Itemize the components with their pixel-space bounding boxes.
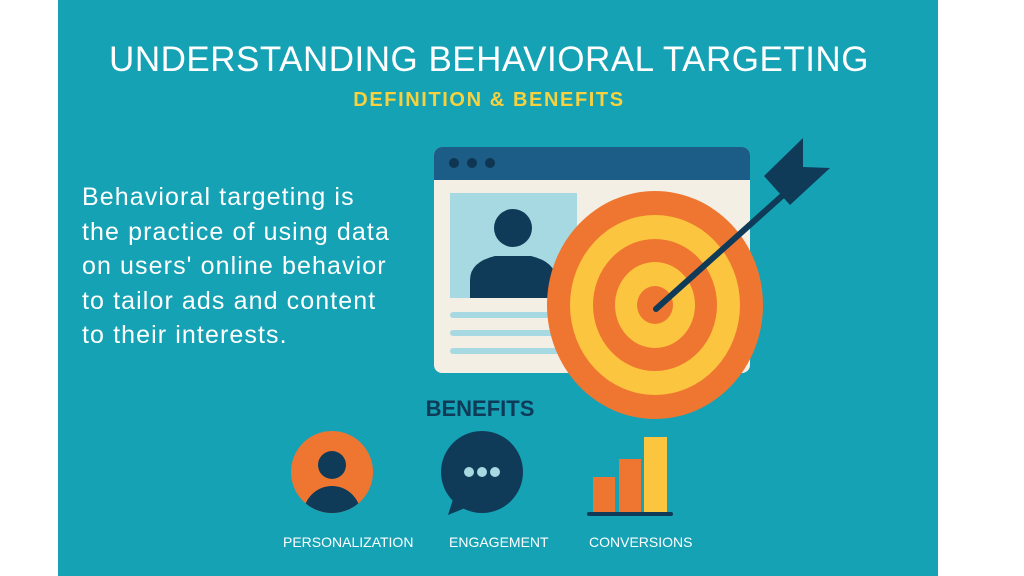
- benefit: conversions: [587, 437, 692, 550]
- definition text: [82, 183, 390, 349]
- subtitle: DEFINITION & BENEFITS: [353, 89, 625, 111]
- heading: benefits: BENEFITS: [426, 396, 534, 421]
- icon: target: [547, 191, 763, 419]
- definition text: to their interests.: [82, 321, 288, 349]
- benefit: engagement: ENGAGEMENT: [449, 534, 549, 550]
- icon: browser window: [434, 147, 750, 373]
- benefit: personalization: PERSONALIZATION: [283, 534, 413, 550]
- icon: arrow: [656, 138, 830, 309]
- definition text: on users' online behavior: [82, 252, 387, 280]
- title: UNDERSTANDING BEHAVIORAL TARGETING: [109, 40, 869, 79]
- benefit: engagement: [441, 431, 549, 550]
- definition text: Behavioral targeting is: [82, 183, 355, 211]
- definition text: to tailor ads and content: [82, 286, 376, 314]
- benefit: conversions: CONVERSIONS: [589, 534, 692, 550]
- definition text: the practice of using data: [82, 218, 390, 246]
- benefit: personalization: [283, 431, 413, 550]
